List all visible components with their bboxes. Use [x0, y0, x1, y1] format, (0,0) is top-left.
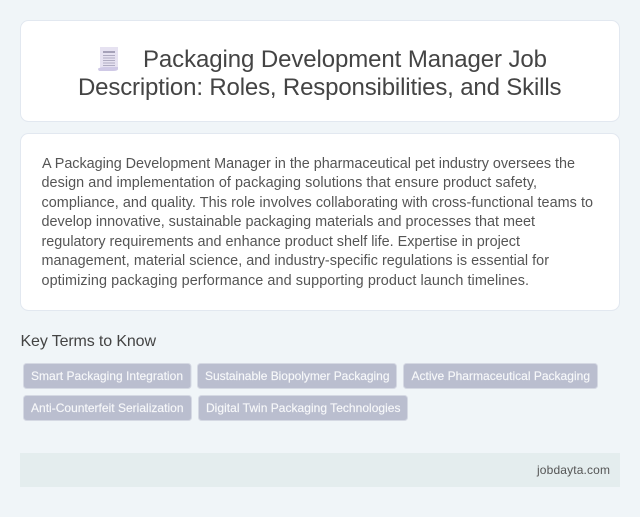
tag list: [24, 364, 598, 420]
description paragraph: develop innovative, sustainable packaging materials and processes that meet: [42, 214, 535, 230]
description paragraph: A Packaging Development Manager in the pharmaceutical pet industry oversees the: [42, 156, 575, 172]
description paragraph: design and implementation of packaging solutions that ensure product safety,: [42, 175, 537, 191]
description paragraph: optimizing packaging performance and supporting product launch timelines.: [42, 273, 529, 289]
tag: sustainable biopolymer: [198, 364, 396, 388]
tag: active pharmaceutical: [404, 364, 598, 388]
description paragraph: [42, 156, 593, 289]
tag: digital twin: Digital Twin Packaging Technologies: [206, 401, 400, 415]
panel: title card: [20, 20, 620, 122]
icon: document: [98, 47, 118, 71]
title line 2: Description: Roles, Responsibilities, and Skills: [78, 74, 562, 101]
footer bar: [20, 453, 620, 487]
footer source: jobdayta.com: [536, 463, 610, 477]
tag: active pharmaceutical: Active Pharmaceutical Packaging: [412, 369, 590, 383]
tag: anti-counterfeit: [24, 396, 192, 420]
heading: key terms: Key Terms to Know: [20, 333, 156, 350]
description paragraph: compliance, and quality. This role involves collaborating with cross-functional teams to: [42, 195, 593, 211]
tag: digital twin: [198, 396, 408, 420]
tag: smart packaging: [24, 364, 191, 388]
description paragraph: regulatory requirements and enhance product shelf life. Expertise in project: [42, 234, 520, 250]
description paragraph: management, material science, and industry-specific regulations is essential for: [42, 253, 549, 269]
title line 1: Packaging Development Manager Job: [143, 46, 547, 73]
tag: anti-counterfeit: Anti-Counterfeit Serialization: [31, 401, 184, 415]
panel: description: [20, 134, 620, 310]
tag: smart packaging: Smart Packaging Integration: [31, 369, 183, 383]
tag: sustainable biopolymer: Sustainable Biopolymer Packaging: [205, 369, 390, 383]
